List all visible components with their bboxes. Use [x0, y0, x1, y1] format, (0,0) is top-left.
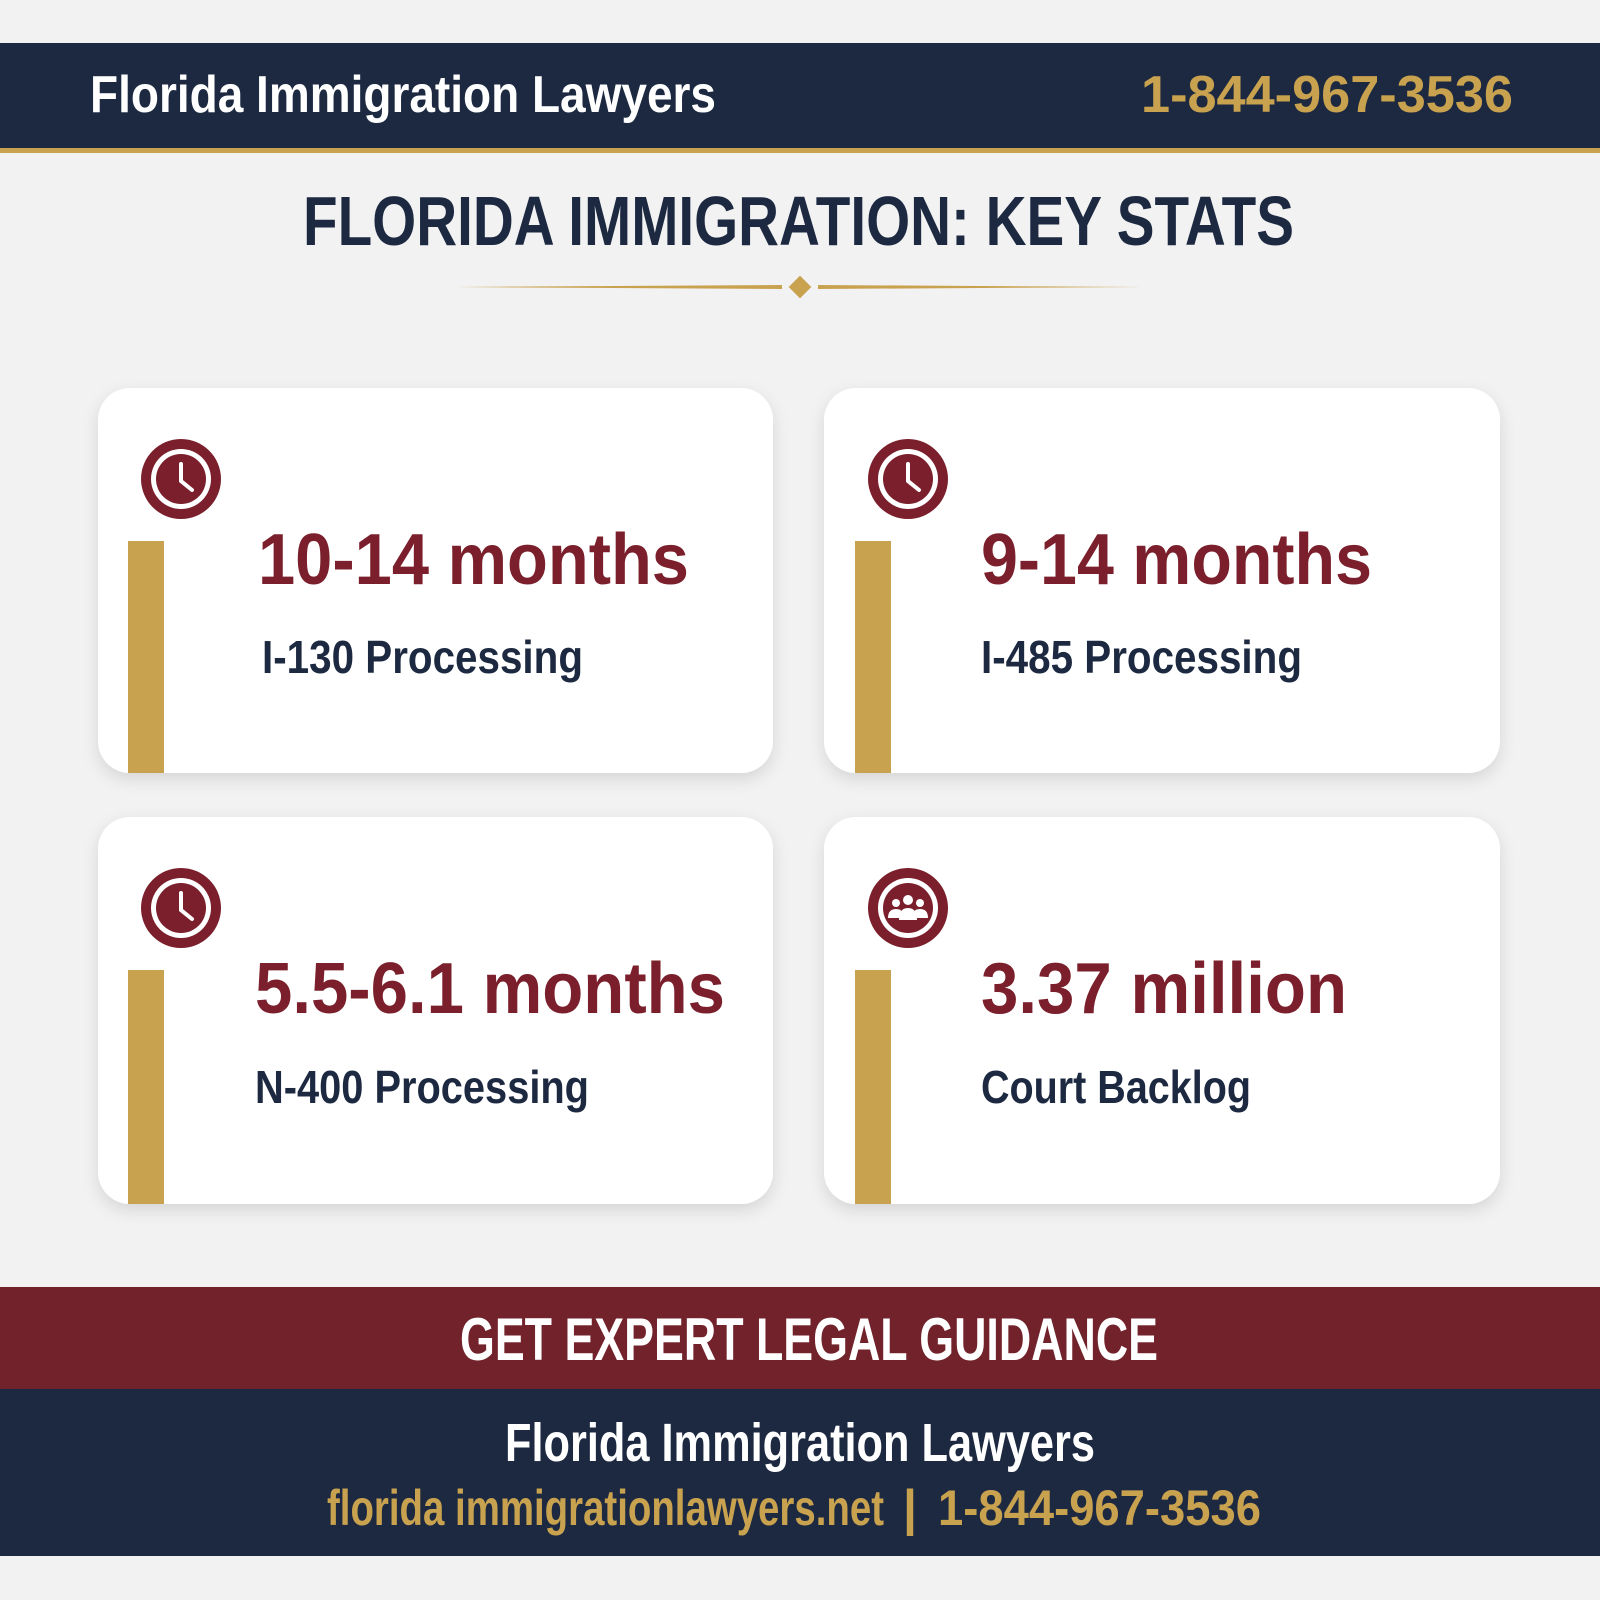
footer contact: |	[903, 1480, 917, 1537]
header firm name: Florida Immigration Lawyers	[90, 66, 716, 124]
panel: N-400: 5.5-6.1 months	[255, 949, 725, 1029]
header bar	[0, 43, 1600, 153]
panel: court backlog: Court Backlog	[981, 1061, 1251, 1113]
panel: court backlog: 3.37 million	[981, 949, 1347, 1029]
icon: group	[868, 868, 948, 948]
panel: N-400: N-400 Processing	[255, 1061, 589, 1113]
icon: clock	[868, 439, 948, 519]
panel: I-485	[824, 388, 1500, 781]
panel: I-485: I-485 Processing	[981, 631, 1302, 683]
call to action band	[0, 1287, 1600, 1389]
footer firm name: Florida Immigration Lawyers	[505, 1413, 1095, 1473]
panel: I-130	[98, 388, 773, 781]
header phone: 1-844-967-3536	[1141, 66, 1513, 124]
panel: I-485: 9-14 months	[981, 520, 1372, 600]
call to action band: GET EXPERT LEGAL GUIDANCE	[460, 1306, 1158, 1373]
title divider	[456, 276, 1143, 298]
footer contact: 1-844-967-3536	[938, 1480, 1261, 1536]
icon: clock	[141, 868, 221, 948]
title: FLORIDA IMMIGRATION: KEY STATS	[303, 182, 1294, 260]
panel: I-130: 10-14 months	[258, 520, 689, 600]
footer contact: florida immigrationlawyers.net	[327, 1480, 884, 1536]
panel: N-400	[98, 817, 773, 1210]
panel: court backlog	[824, 817, 1500, 1210]
panel: I-130: I-130 Processing	[262, 631, 583, 683]
icon: clock	[141, 439, 221, 519]
footer	[0, 1389, 1600, 1556]
